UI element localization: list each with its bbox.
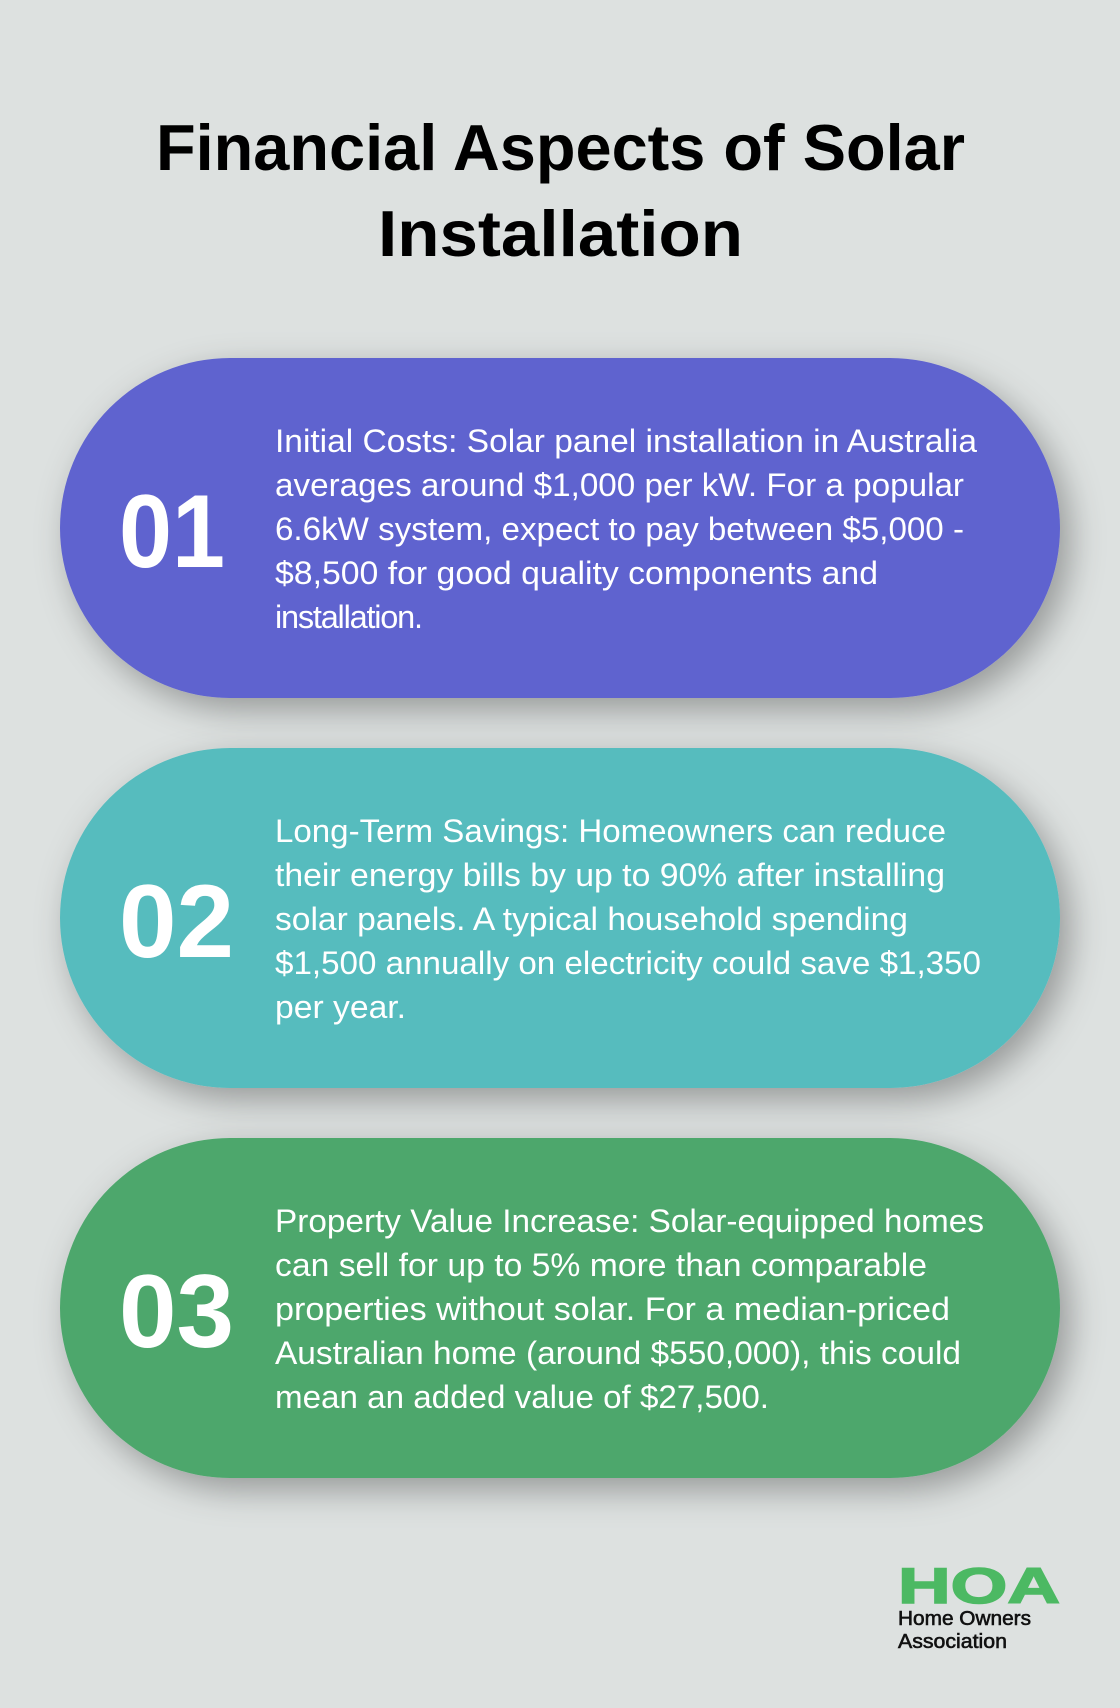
text block: per year.: [275, 989, 406, 1025]
number 02: 02: [119, 864, 234, 980]
number 01: 01: [119, 474, 225, 590]
logo: Home Owners Association: HOA: [898, 1558, 1060, 1614]
text block: Property Value Increase: Solar-equipped homes: [275, 1203, 984, 1239]
text block: $8,500 for good quality components and: [275, 555, 878, 591]
text block: installation.: [275, 599, 423, 635]
text block: 6.6kW system, expect to pay between $5,000 -: [275, 511, 964, 547]
text block: their energy bills by up to 90% after installing: [275, 857, 945, 893]
panel: long-term savings: [60, 748, 1060, 1088]
logo: Home Owners Association: [898, 1558, 1060, 1653]
pill background: [60, 748, 1060, 1088]
number 03: 03: [119, 1254, 234, 1370]
title: [156, 111, 965, 270]
panel: initial costs: [60, 358, 1060, 698]
text block: mean an added value of $27,500.: [275, 1379, 769, 1415]
panel: property value increase: [60, 1138, 1060, 1478]
text block: Long-Term Savings: Homeowners can reduce: [275, 813, 946, 849]
text block: [275, 1203, 984, 1415]
text block: properties without solar. For a median-priced: [275, 1291, 950, 1327]
text block: Initial Costs: Solar panel installation in Australia: [275, 423, 978, 459]
title: Financial Aspects of Solar: [156, 111, 965, 184]
text block: [275, 813, 981, 1025]
text block: $1,500 annually on electricity could save $1,350: [275, 945, 981, 981]
text block: can sell for up to 5% more than comparable: [275, 1247, 927, 1283]
logo: Home Owners Association: Association: [898, 1631, 1007, 1653]
pill background: [60, 1138, 1060, 1478]
text block: averages around $1,000 per kW. For a popular: [275, 467, 964, 503]
pill background: [60, 358, 1060, 698]
text block: solar panels. A typical household spending: [275, 901, 908, 937]
logo: Home Owners Association: Home Owners: [898, 1608, 1031, 1630]
text block: [275, 423, 978, 635]
title: Installation: [378, 197, 743, 270]
text block: Australian home (around $550,000), this could: [275, 1335, 961, 1371]
